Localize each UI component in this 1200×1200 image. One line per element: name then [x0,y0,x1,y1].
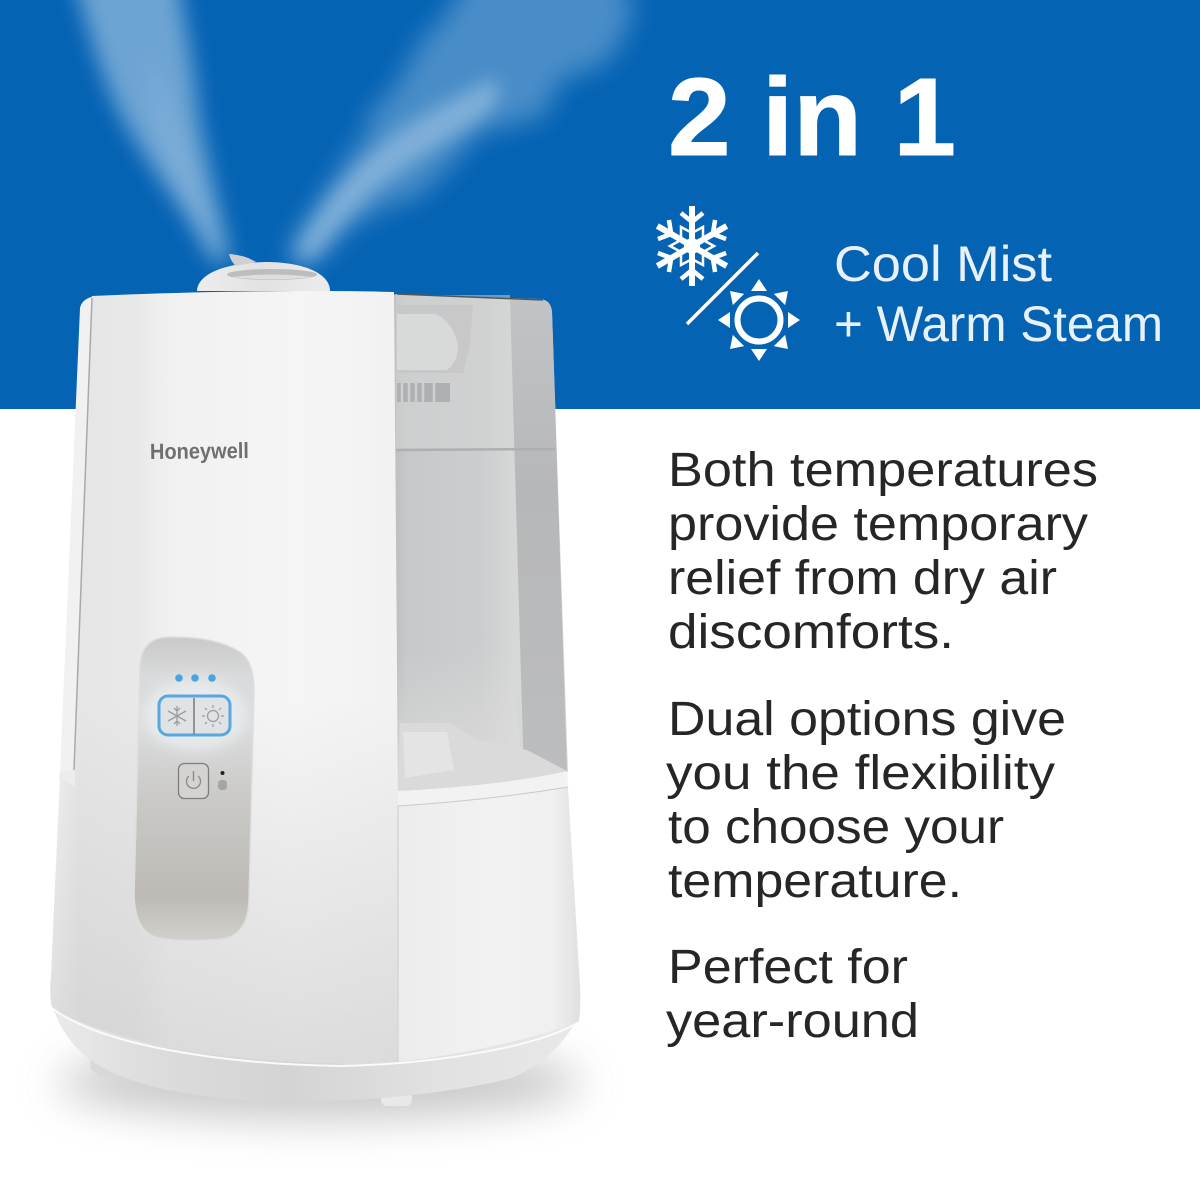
subtitle: + Warm Steam [834,296,1163,352]
cool mist button icon [168,706,186,726]
mode buttons [159,696,230,735]
steam plumes [72,0,629,262]
base feet [90,1056,412,1106]
lower left ledge [59,770,75,786]
body seam [397,806,399,1062]
text block: dual options: to choose your [668,801,1004,854]
steam: right plume [285,0,629,262]
tank upper shoulder [396,295,514,450]
left side strip [60,296,100,772]
text block: dual options: Dual options give [668,693,1066,746]
warm steam button icon [202,705,224,727]
base seam [52,1008,579,1066]
tank level line [396,449,555,450]
blue header background [0,0,1200,409]
text block: dual options: you the flexibility [666,747,1055,800]
floor shadow [58,1044,582,1120]
text block: both temperatures: discomforts. [668,606,954,659]
text block: both temperatures: provide temporary [668,498,1088,551]
main body [50,291,398,1063]
round base [52,1005,580,1102]
text block: year-round: Perfect for [668,941,908,994]
text block: both temperatures: Both temperatures [668,444,1098,497]
water tank [390,294,568,806]
tank floor glow [398,650,524,791]
tank top edge [397,294,543,300]
text block: both temperatures: relief from dry air [668,552,1057,605]
text block: dual options [666,693,1066,908]
steam nozzle cap [197,254,330,291]
icon: snowflake [652,206,732,286]
text block: year-round [666,941,919,1048]
subtitle [834,236,1163,352]
icon: sun [718,279,800,361]
left strip edge [74,298,92,770]
text block: both temperatures [668,444,1098,659]
tank dark side band [510,299,567,779]
status dot and lock [218,771,227,790]
subtitle: Cool Mist [834,236,1052,292]
button glow [143,679,247,751]
text block: dual options: temperature. [668,855,962,908]
title: 2 in 1 [668,56,956,179]
indicator lights [175,674,216,682]
lower right body [397,771,580,1062]
inner tank floor piece [398,723,567,791]
icon: divider slash [687,253,758,324]
tank cap inside [397,305,473,402]
steam: left plume [72,0,230,262]
text block: year-round: year-round [666,995,919,1048]
control panel [134,637,254,941]
tank base ring [398,771,568,806]
humidifier product [50,254,582,1120]
brand wordmark: Honeywell [150,438,249,464]
power button [178,764,208,798]
